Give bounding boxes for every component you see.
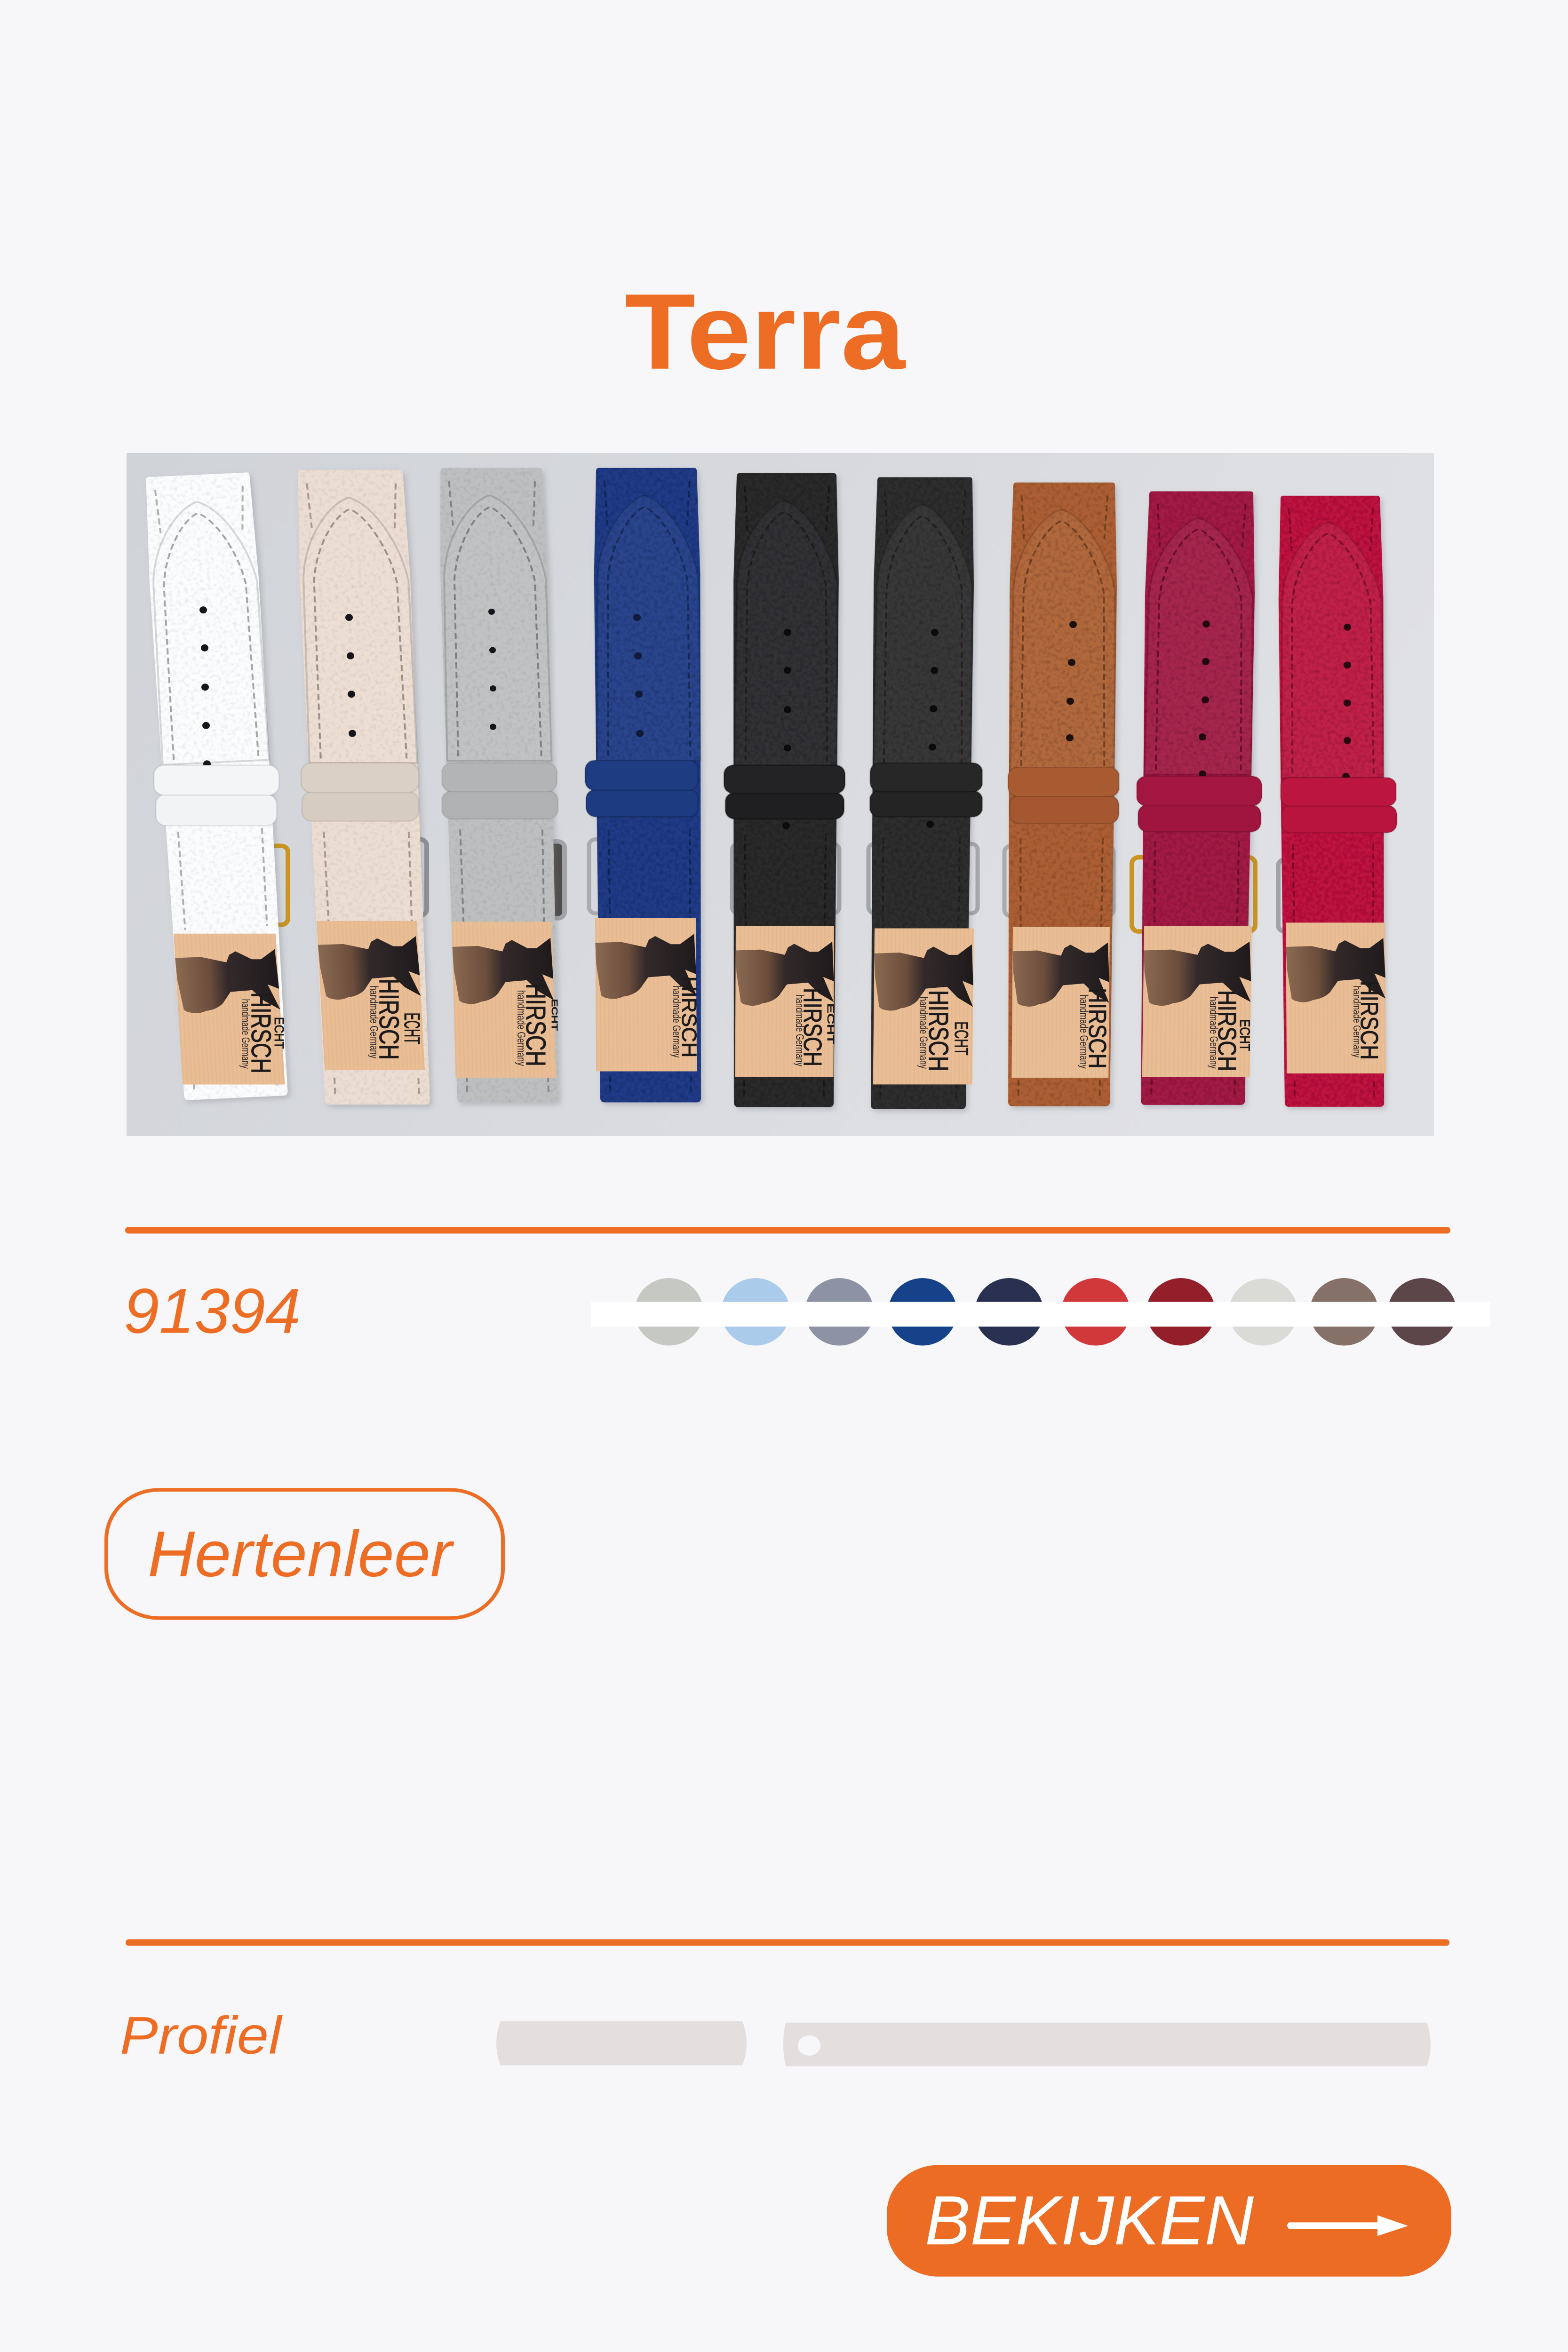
strap: brown: handmade Germany [1078,994,1090,1069]
material tag: Hertenleer [106,1490,503,1618]
strap: navy blue [585,468,704,1103]
strap: burgundy: ECHT [1237,1019,1252,1051]
strap: beige [295,470,433,1104]
strap: brown [1004,483,1119,1106]
white band over swatches [591,1302,1490,1327]
strap: beige: ECHT [400,1013,423,1044]
strap: white: ECHT [272,1017,287,1049]
strap: grey: HIRSCH [521,984,551,1066]
strap: white: handmade Germany [239,999,252,1069]
strap: dark charcoal [868,477,982,1109]
strap: dark charcoal: handmade Germany [917,997,930,1069]
strap: brown: HIRSCH [1084,988,1111,1069]
button: Bekijken [887,2165,1451,2277]
button: Bekijken: BEKIJKEN [925,2182,1254,2259]
title: Terra [625,272,907,392]
strap: navy blue: HIRSCH [677,977,700,1057]
strap: beige: handmade Germany [368,985,381,1058]
strap: beige: HIRSCH [374,978,405,1060]
strap: burgundy: HIRSCH [1213,990,1241,1071]
strap: burgundy [1132,491,1262,1105]
material tag: Hertenleer: Hertenleer [148,1518,454,1590]
colour swatches [591,1278,1490,1345]
strap: grey [438,468,565,1103]
article number: 91394 [124,1275,301,1346]
icon: arrow [1287,2215,1408,2236]
strap: dark charcoal: HIRSCH [923,990,954,1071]
strap: grey: handmade Germany [515,990,528,1066]
strap: dark charcoal: ECHT [951,1021,971,1056]
profile label: Profiel [120,2006,283,2065]
profile shape: long section with hole [783,2023,1431,2066]
profile shape: short section [496,2021,747,2066]
strap: grey: ECHT [550,999,560,1031]
panel: product photo of watch straps [127,453,1434,1136]
strap: black: handmade Germany [794,994,806,1066]
strap: crimson red: HIRSCH [1356,981,1383,1060]
strap: crimson red [1278,496,1397,1107]
strap: burgundy: handmade Germany [1208,997,1220,1069]
strap: white [143,472,291,1100]
divider top [125,1227,1450,1233]
strap: white: HIRSCH [246,993,277,1073]
strap: black: HIRSCH [798,988,826,1066]
strap: crimson red: handmade Germany [1351,985,1363,1058]
strap: black [724,473,845,1107]
strap: black: ECHT [825,1003,836,1044]
strap: navy blue: handmade Germany [670,985,683,1058]
divider bottom [126,1939,1449,1946]
